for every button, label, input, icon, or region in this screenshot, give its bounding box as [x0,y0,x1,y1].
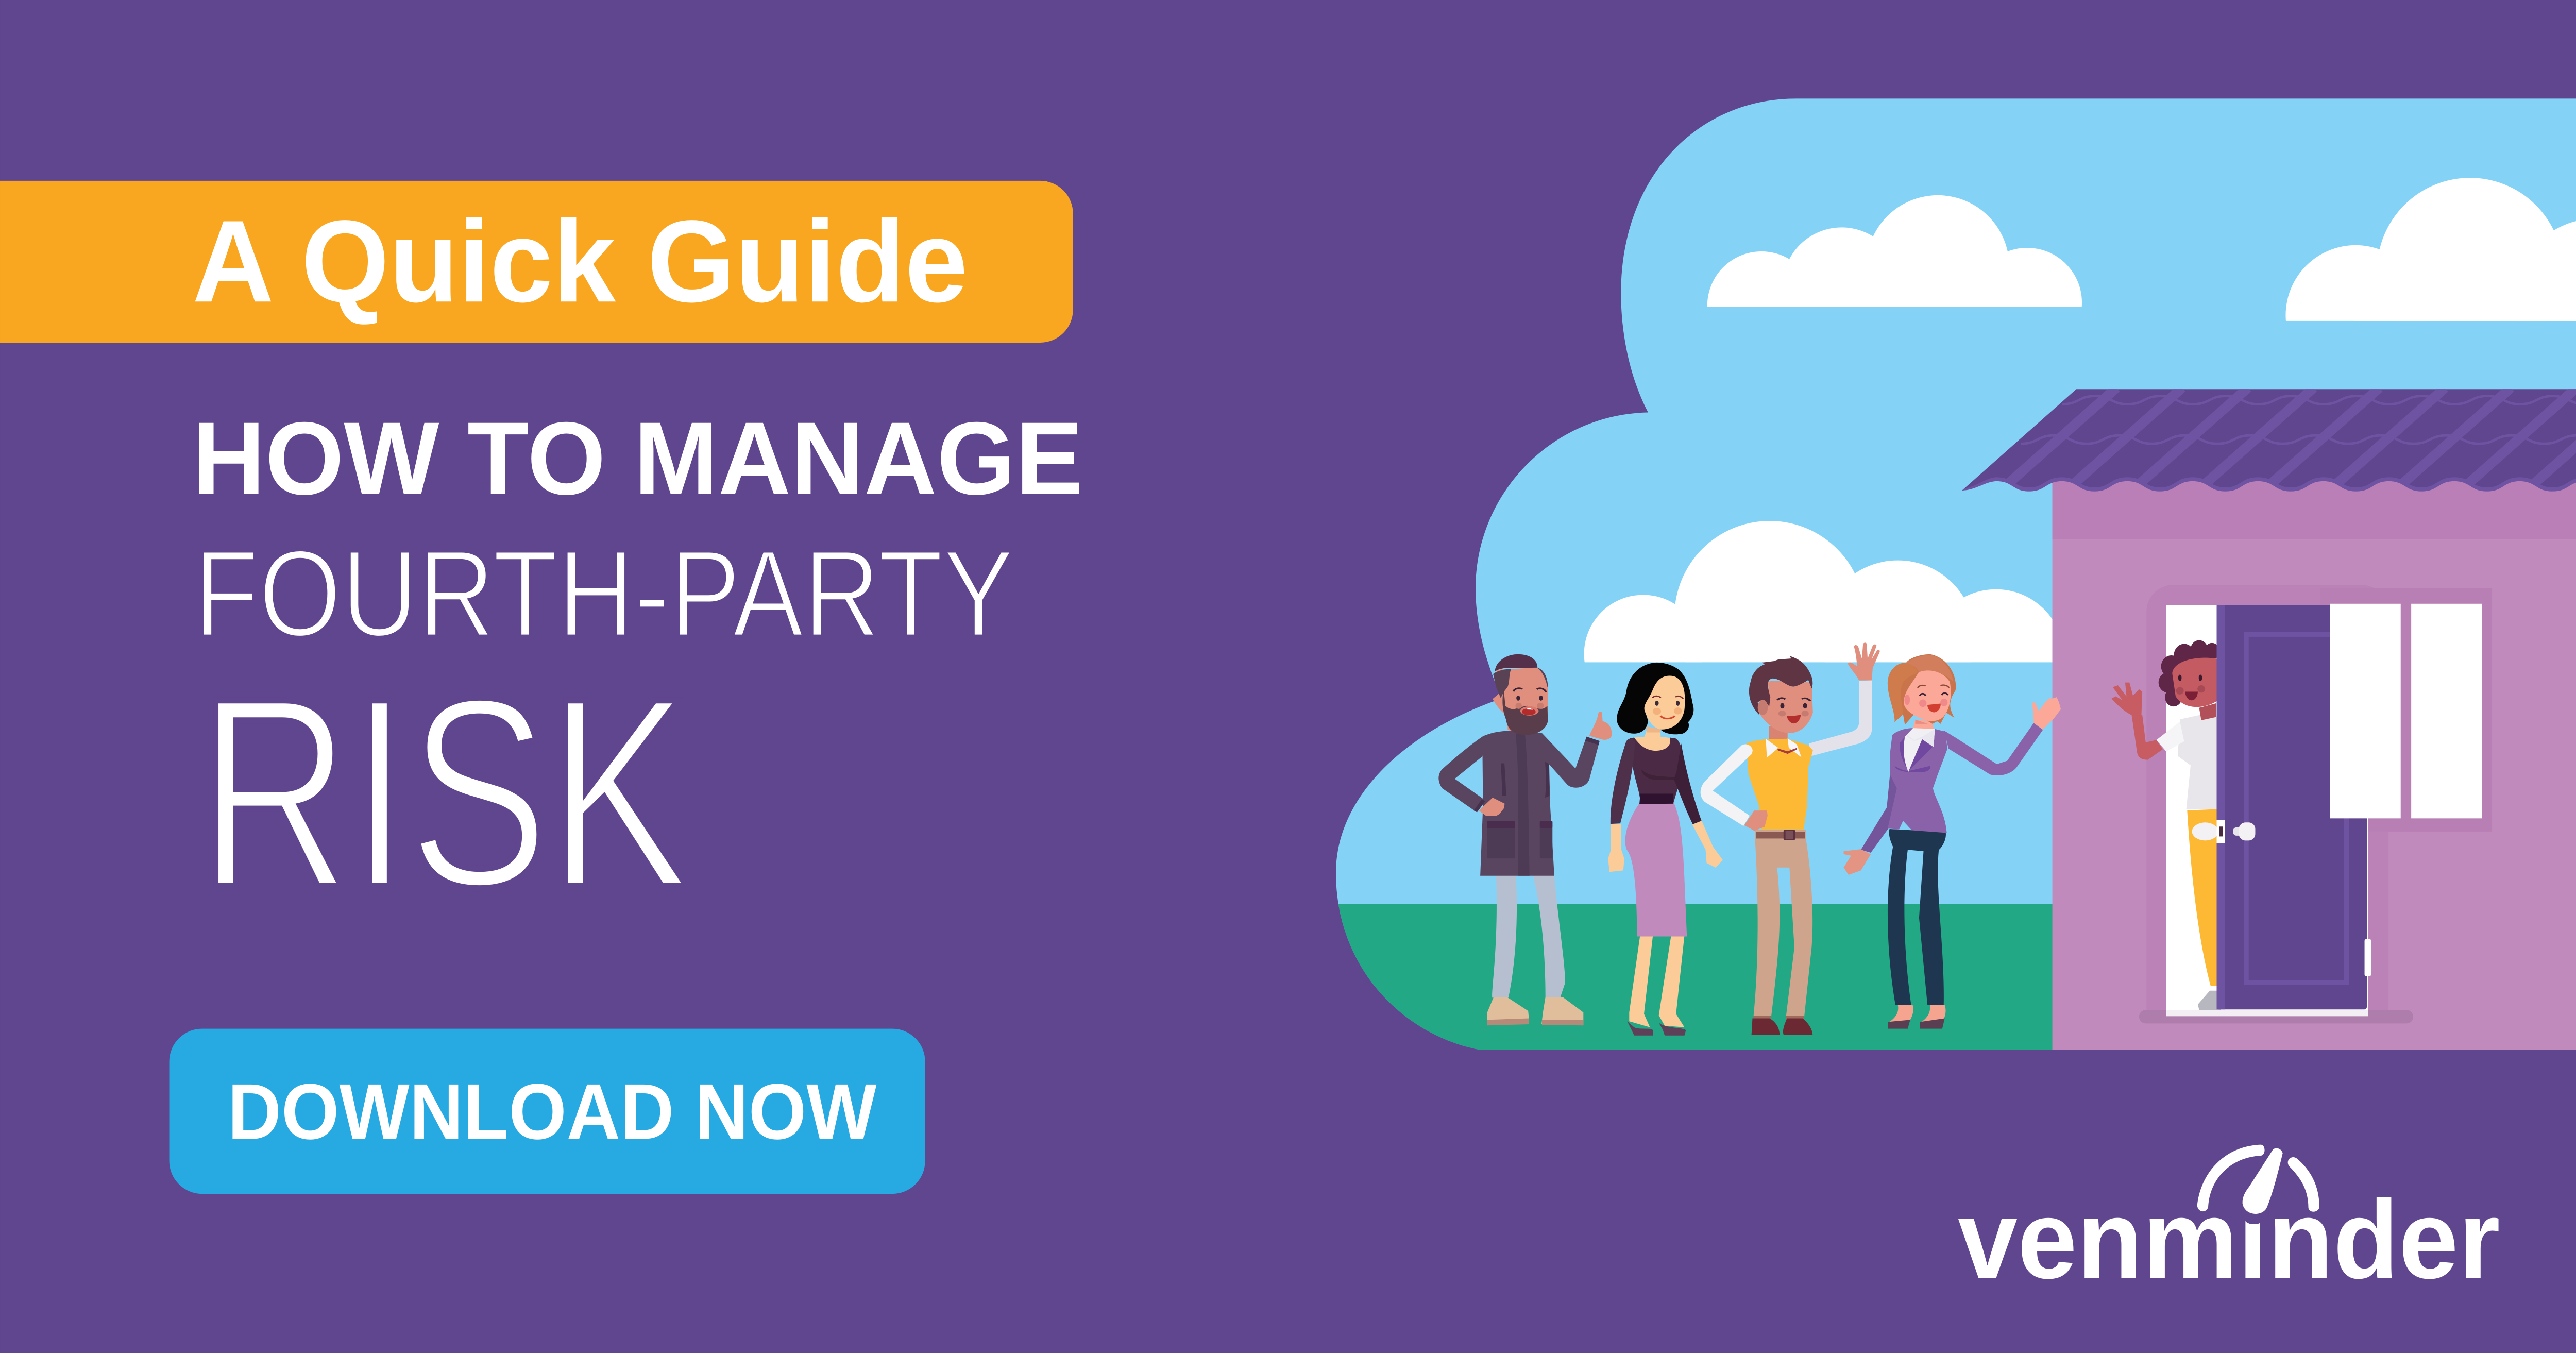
download button [170,1029,925,1194]
heading: how to manage: HOW TO MANAGE [192,400,1083,516]
person: woman in purple skirt [1608,663,1723,1036]
person: bearded man [1438,654,1612,1025]
heading: risk: RISK [199,641,688,943]
cloud: top right [2285,178,2576,321]
sky shape [1336,98,2576,1050]
doorway [2166,605,2368,1016]
orange banner: A Quick Guide [192,196,968,326]
ground [1315,904,2576,1052]
doorstep [2139,1010,2413,1023]
orange banner [0,181,1073,343]
door [2192,605,2371,1009]
door hinge [2365,939,2371,976]
window frame [2320,588,2492,832]
logo gauge icon [2197,1145,2319,1224]
person: man in yellow vest [1701,642,1880,1035]
person: woman in purple jacket [1844,654,2061,1029]
heading: fourth-party: FOURTH-PARTY [194,524,1014,662]
person: woman in doorway [2111,640,2221,1010]
house wall [2053,477,2576,1050]
door handle [2192,820,2255,843]
illustration scene [1315,98,2576,1052]
door surround [2146,585,2388,1017]
cloud: top left [1707,195,2082,307]
roof [1962,388,2576,492]
download button: DOWNLOAD NOW [228,1068,877,1156]
venminder logo: venminder [1958,1177,2500,1301]
cloud: behind people [1584,521,2053,663]
window [2330,604,2482,818]
